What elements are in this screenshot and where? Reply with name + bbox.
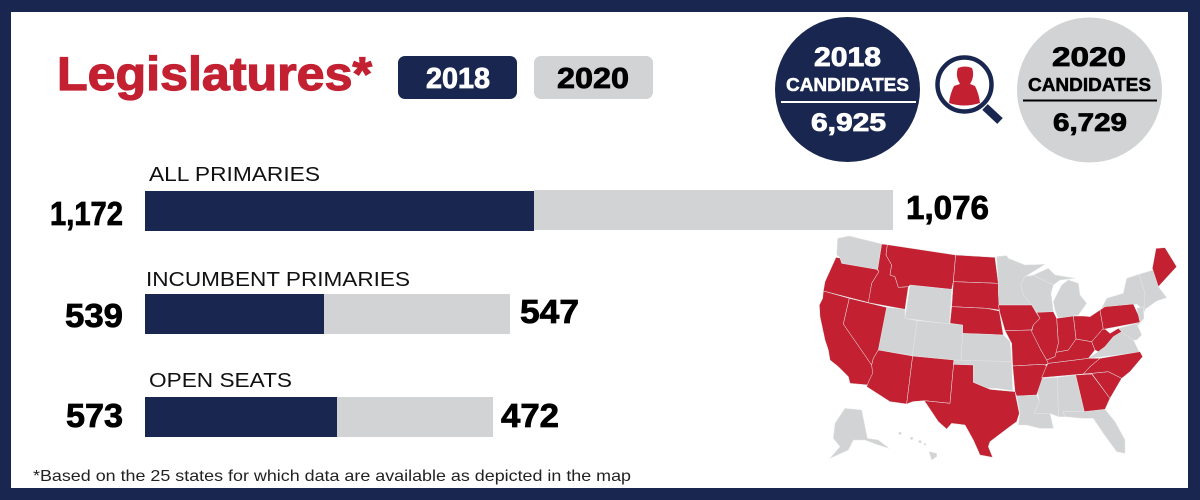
stat circle: 2020 candidates: CANDIDATES <box>1028 75 1151 95</box>
legend: 2018 <box>398 56 517 99</box>
stat circle: 2018 candidates: CANDIDATES <box>786 75 909 95</box>
stat circle: 2018 candidates <box>775 17 920 162</box>
bar group: all primaries <box>50 164 989 232</box>
bar group: open seats: 573 <box>66 397 123 434</box>
bar group: open seats: OPEN SEATS <box>149 370 292 392</box>
bar group: all primaries: 1,172 <box>50 195 123 232</box>
bar group: open seats <box>66 370 559 437</box>
icon: magnifying glass with person <box>938 58 1000 121</box>
bar group: open seats: 472 <box>501 397 559 434</box>
legend: 2018: 2018 <box>426 63 490 95</box>
stat circle: 2020 candidates: 6,729 <box>1053 109 1127 137</box>
bar group: incumbent primaries: INCUMBENT PRIMARIES <box>146 269 410 291</box>
bar group: incumbent primaries <box>65 269 579 334</box>
legend: 2020 <box>534 56 653 99</box>
bar group: all primaries: 1,076 <box>906 189 989 226</box>
legend <box>398 56 653 99</box>
stat circle: 2020 candidates: 2020 <box>1052 42 1126 72</box>
bar group: all primaries: ALL PRIMARIES <box>149 164 320 186</box>
stat circle: 2018 candidates: 6,925 <box>811 109 886 137</box>
bar group: incumbent primaries: 547 <box>520 293 579 330</box>
stat circle: 2020 candidates <box>1017 18 1162 162</box>
US map <box>819 236 1177 460</box>
footnote: *Based on the 25 states for which data are available as depicted in the map <box>33 468 631 485</box>
states with data (red) <box>819 244 1177 457</box>
legend: 2020: 2020 <box>557 63 629 95</box>
states without data (gray) <box>830 236 1167 460</box>
bar group: incumbent primaries: 539 <box>65 297 123 334</box>
title: Legislatures* <box>57 47 373 100</box>
stat circle: 2018 candidates: 2018 <box>814 42 881 72</box>
